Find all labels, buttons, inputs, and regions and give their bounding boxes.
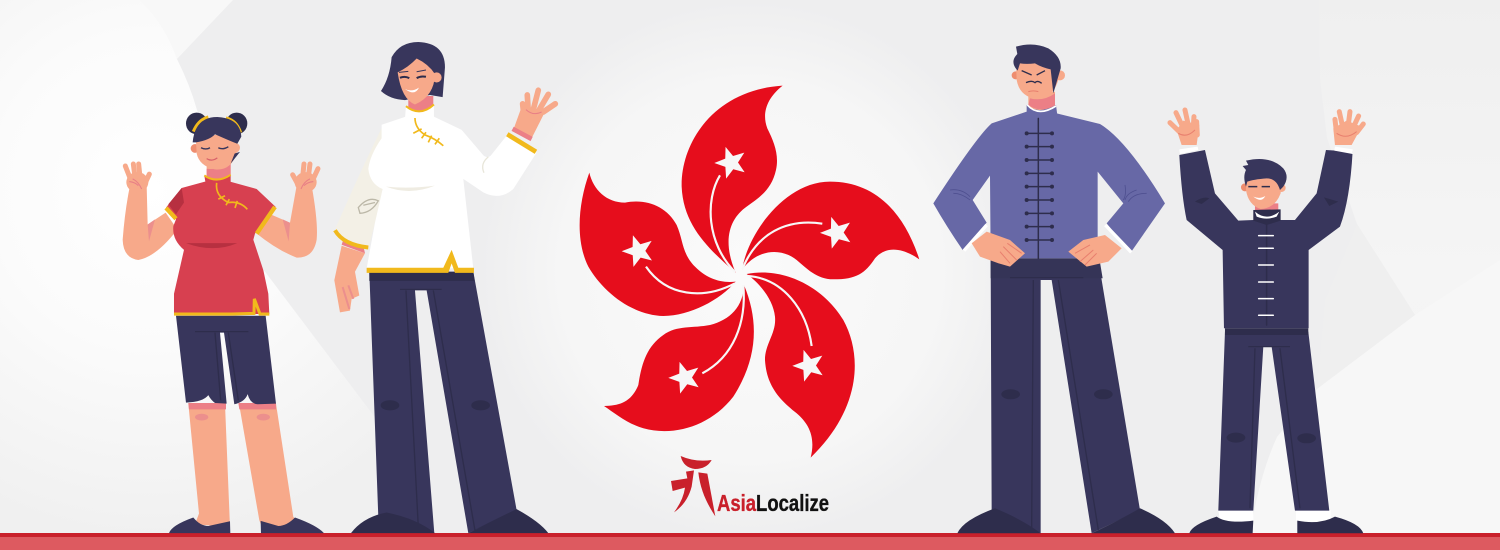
petal: lower right xyxy=(747,272,855,458)
man left hand xyxy=(972,232,1025,267)
boy left hand xyxy=(1170,110,1199,145)
girl neck and head xyxy=(186,113,247,182)
woman collar and frog closure xyxy=(405,104,443,146)
petal: lower left xyxy=(604,285,754,431)
man right hand xyxy=(1068,235,1122,267)
man head and hair xyxy=(1012,45,1065,110)
logo mark xyxy=(671,456,715,516)
man collar xyxy=(1027,105,1057,119)
woman left hand xyxy=(334,240,365,312)
figure: man in blue jacket xyxy=(933,45,1175,533)
boy collar xyxy=(1253,209,1281,225)
figure: boy in navy suit xyxy=(1170,110,1363,533)
floor bar xyxy=(0,533,1500,550)
logo wordmark: AsiaLocalize xyxy=(717,490,829,516)
woman right hand xyxy=(507,90,555,152)
icon: girl right hand xyxy=(293,164,318,192)
woman head and hair xyxy=(381,42,445,115)
logo: AsiaLocalize xyxy=(671,456,829,516)
emblem: bauhinia flower xyxy=(580,86,919,458)
boy frog buttons xyxy=(1259,225,1273,325)
figure: woman in white shirt xyxy=(334,42,555,533)
boy head and hair xyxy=(1241,159,1287,217)
figure: girl in red top xyxy=(123,113,324,533)
girl collar and frog closure xyxy=(204,175,247,209)
petal: right xyxy=(742,182,919,279)
icon: girl left hand xyxy=(125,164,149,192)
man frog buttons xyxy=(1025,118,1054,258)
petal: top xyxy=(682,86,783,273)
boy right hand xyxy=(1333,112,1363,145)
petal: left xyxy=(580,173,736,316)
